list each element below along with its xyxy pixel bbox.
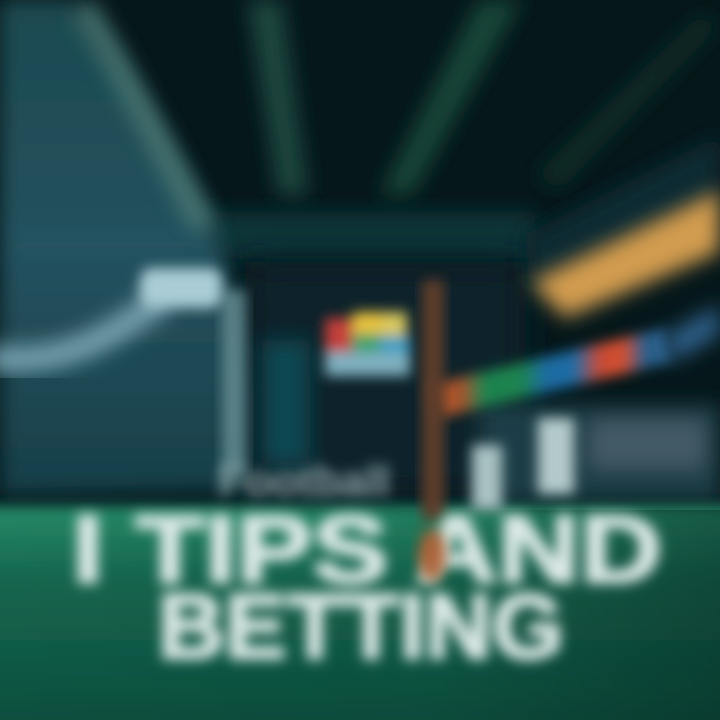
rainbow flag: [325, 312, 410, 376]
right stand block: [480, 135, 720, 500]
ceiling beams: [248, 0, 720, 195]
upper glyph spires: [472, 445, 502, 510]
title: [72, 418, 662, 678]
yellow scoreboard band: [530, 190, 720, 318]
heading line two: BETTING: [158, 576, 564, 678]
bright curved streak: [0, 298, 165, 359]
vertical light column: [222, 290, 246, 475]
heading line one: I TIPS AND: [72, 496, 662, 603]
coloured strip: [430, 328, 672, 418]
central pole: [422, 280, 444, 520]
pitch: [0, 506, 720, 720]
edge highlight: [82, 5, 205, 228]
central dark stand: [245, 262, 525, 497]
small headline: Football: [218, 457, 390, 506]
roof cross band: [205, 212, 535, 258]
pole base on pitch: [418, 529, 446, 581]
bright streak head: [140, 268, 222, 308]
left translucent structure: [0, 0, 246, 495]
